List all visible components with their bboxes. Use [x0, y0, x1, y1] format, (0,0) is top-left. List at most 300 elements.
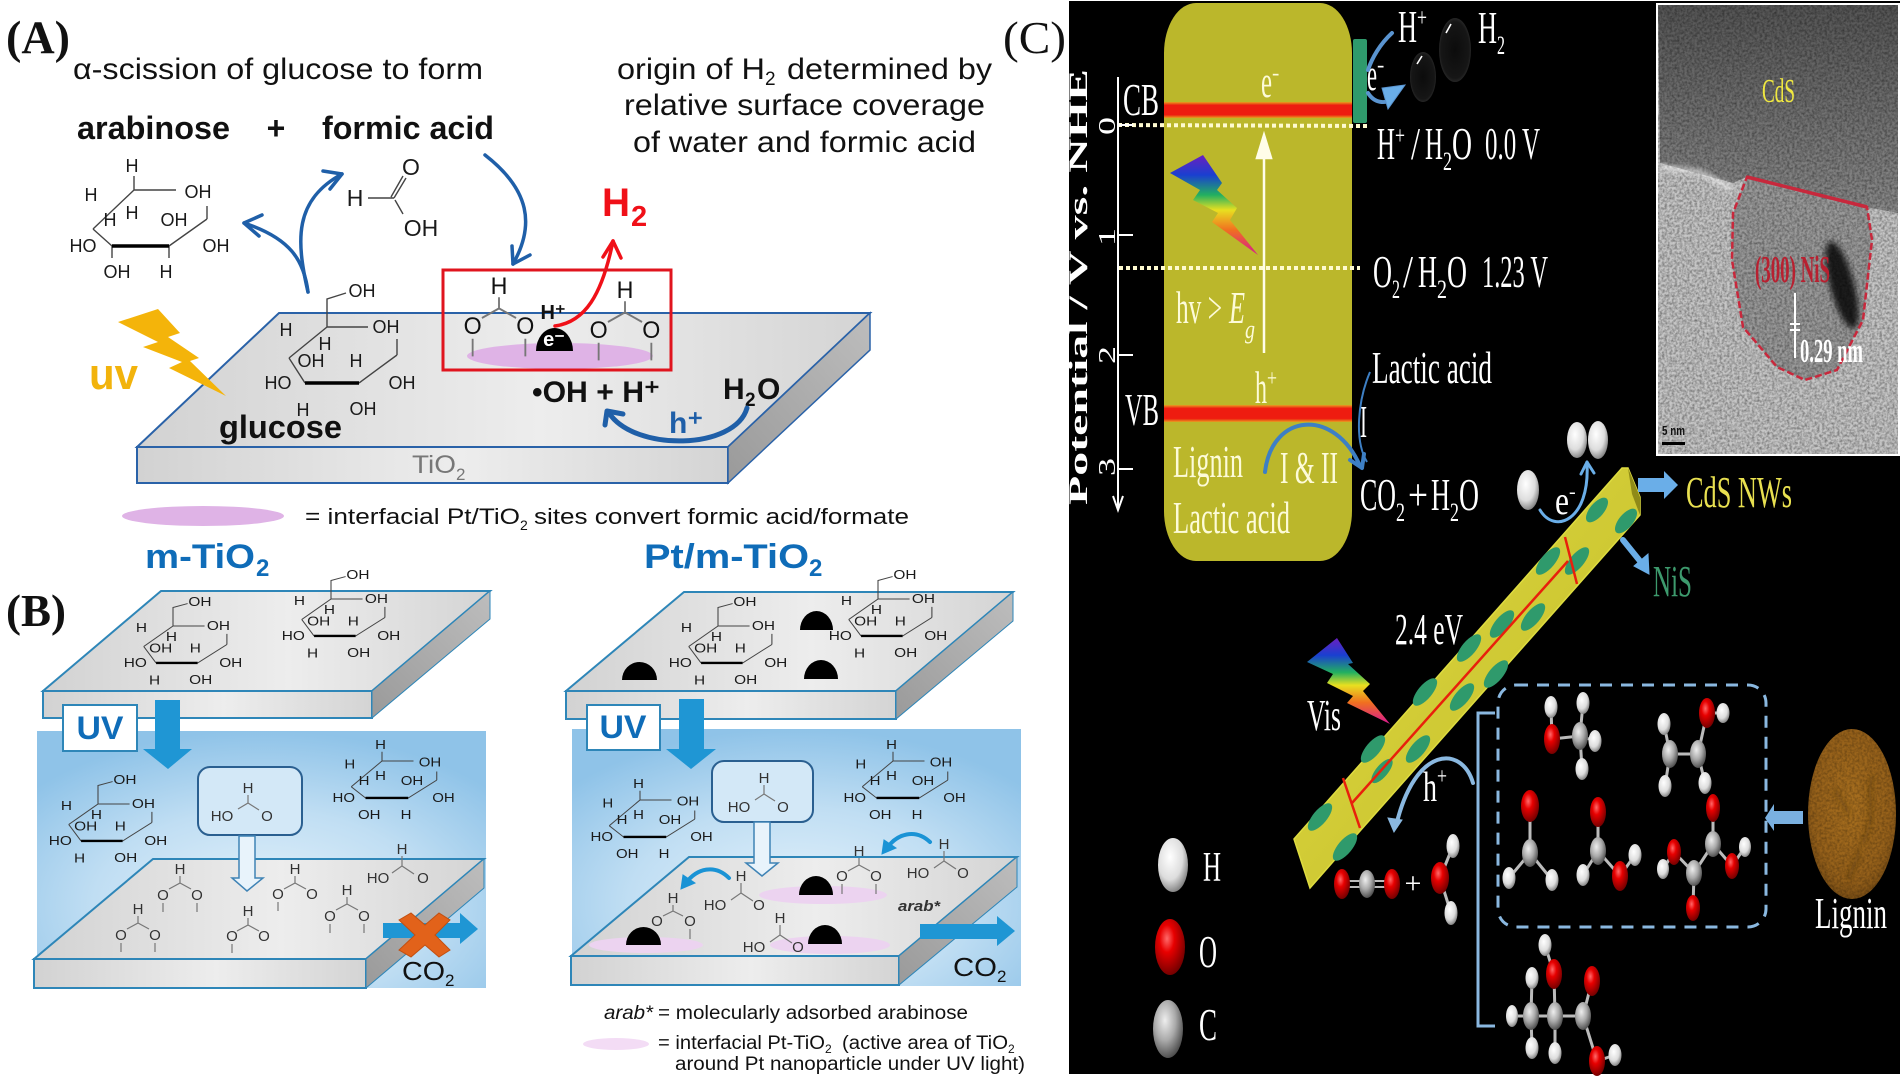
band labels and right annotations: Lactic acid [1372, 342, 1492, 393]
molecule: glucose: OH [388, 373, 416, 393]
heading Pt/m-TiO2: Pt/m-TiO [644, 538, 809, 576]
legend: interfacial Pt-TiO2: 2 [1008, 1042, 1015, 1056]
arrow: UV left [143, 700, 192, 769]
molecule: formic acid: OH [404, 215, 438, 241]
label H+: H⁺ [540, 302, 566, 324]
glucose on top plate right 2: HO [829, 629, 852, 644]
text: origin of H2: 2 [765, 69, 776, 90]
molecule: glucose: OH [372, 317, 400, 337]
glucose in liquid left: OH [74, 819, 97, 834]
molecule 6 [1506, 934, 1622, 1076]
molecule: arabinose: OH [202, 236, 230, 256]
heading Pt/m-TiO2 [644, 538, 822, 582]
band interior labels: Lactic acid [1173, 492, 1290, 543]
molecule: arabinose: OH [104, 262, 130, 282]
arabinose in liquid right 2: H [886, 768, 897, 783]
glucose on top plate left 2: OH [346, 568, 369, 583]
band labels and right annotations: H [1431, 469, 1450, 520]
molecule: glucose: OH [350, 399, 376, 419]
molecule: glucose: H [280, 320, 292, 340]
arabinose in liquid left: OH [419, 754, 441, 769]
molecule: arabinose: HO [70, 236, 96, 256]
molecule 2 [1658, 698, 1730, 797]
band labels and right annotations: 2 [1392, 275, 1400, 304]
panel C label: (C) [1003, 12, 1066, 63]
heading m-TiO2: 2 [256, 555, 269, 582]
UV box left: UV [76, 710, 124, 746]
band labels and right annotations: O [1373, 246, 1392, 297]
formate groups on left plate: O [157, 887, 169, 904]
legend: interfacial sites: sites convert formic acid/formate [534, 504, 909, 529]
glucose on top plate right 1: OH [694, 641, 717, 656]
adsorbed formate right [590, 278, 660, 360]
band interior labels [1173, 56, 1338, 543]
label H2O: O [757, 373, 780, 406]
formate groups on left plate [115, 861, 370, 953]
arabinose in liquid left: H [344, 756, 355, 771]
formic acid box left: O [261, 808, 273, 825]
legend: arab*: = molecularly adsorbed arabinose [658, 1003, 968, 1024]
arabinose in liquid right 2: HO [844, 790, 866, 805]
formate and formic on right plate: O [684, 913, 696, 930]
yellow band diagram body [1164, 3, 1352, 561]
formate and formic on right plate: HO [743, 939, 765, 956]
plate label TiO2 [412, 451, 465, 484]
molecule 1 [1544, 692, 1602, 780]
molecule 5 [1657, 794, 1751, 921]
molecule: glucose: OH [298, 351, 324, 371]
formic acid on left plate [367, 841, 429, 887]
pink active areas on right plate [589, 886, 890, 954]
legend: O atom [1155, 919, 1217, 977]
label h+: h [1423, 765, 1437, 811]
formate and formic on right plate: O [836, 868, 848, 885]
glucose on top plate left 2: HO [282, 629, 305, 644]
arrow: red to H2 [555, 241, 621, 326]
formic acid box right: O [777, 799, 789, 816]
heading: alpha scission: α-scission of glucose to form [73, 53, 483, 86]
glucose in liquid left: H [115, 819, 126, 834]
molecule: arabinose: H [126, 203, 138, 223]
formate and formic on right plate: H [736, 868, 746, 885]
text: origin of H2: relative surface coverage [624, 89, 985, 122]
text: origin of H2: origin of H [617, 53, 765, 86]
arabinose in liquid right 2: OH [912, 773, 934, 788]
green NiS strip [1353, 39, 1367, 123]
formate groups on left plate: O [258, 928, 270, 945]
formate and formic on right plate: HO [704, 897, 726, 914]
formate groups on left plate: H [133, 901, 143, 918]
molecule: formic acid: O [402, 154, 420, 180]
icon: visible light bolt [1307, 638, 1390, 724]
axis ticks labels: 1 [1094, 228, 1120, 246]
molecule: formic acid: H [347, 185, 363, 211]
glucose in liquid left: H [61, 799, 72, 814]
band labels and right annotations: H [1418, 246, 1437, 297]
curved arrow right plate 1 [882, 834, 930, 854]
label H2O: 2 [745, 390, 756, 411]
legend: interfacial Pt-TiO2: 2 [825, 1042, 832, 1056]
nanowire [1294, 468, 1641, 888]
axis ticks labels: 0 [1094, 117, 1120, 135]
band interior labels: I & II [1280, 442, 1338, 493]
arabinose in liquid right 1: OH [690, 829, 713, 844]
dashed intermediates box [1498, 685, 1766, 927]
label H2 [602, 181, 647, 233]
formic acid on left plate: HO [367, 870, 389, 887]
glucose in liquid left [49, 773, 167, 866]
glucose on top plate left 1: OH [149, 641, 172, 656]
band labels and right annotations: 1.23 V [1482, 246, 1548, 297]
glucose in liquid left: OH [132, 797, 155, 812]
adsorbed formate right: O [642, 318, 660, 344]
blocked X [399, 913, 450, 957]
UV box right: UV [600, 709, 647, 745]
arrow: UV right [666, 699, 716, 769]
formate groups on left plate: O [358, 908, 370, 925]
TEM image [1656, 3, 1900, 456]
band labels and right annotations: / [1403, 246, 1413, 297]
dotted line: O2/H2O [1119, 266, 1360, 270]
text: origin of H2: of water and formic acid [633, 126, 976, 159]
molecule: glucose: H [350, 351, 362, 371]
UV box right [587, 705, 660, 750]
H atom sphere and label: - [1569, 481, 1576, 503]
molecule: arabinose: OH [160, 210, 188, 230]
arabinose in liquid left: OH [432, 790, 455, 805]
arabinose in liquid right 2 [844, 737, 966, 822]
arrow: lignin to intermediates [1765, 804, 1803, 831]
glucose on top plate left 1: H [190, 641, 201, 656]
label H2O: H [723, 373, 745, 406]
Pt particle top 3 [804, 660, 838, 679]
band interior labels: E [1228, 282, 1245, 333]
glucose on top plate right 1: H [681, 621, 692, 636]
glucose on top plate left 1: OH [219, 656, 242, 671]
Pt particle bottom 2 [626, 927, 661, 945]
arabinose in liquid right 1: H [602, 795, 613, 810]
adsorbed formate left: O [464, 314, 482, 340]
hollow arrow right [746, 822, 778, 876]
Pt particle bottom 3 [808, 925, 842, 944]
active site ellipse [467, 343, 653, 369]
electron transfer arrows top [1368, 33, 1405, 109]
arabinose in liquid right 1: OH [677, 793, 699, 808]
formate and formic on right plate: H [668, 890, 678, 907]
label 2.4 eV: 2.4 eV [1395, 605, 1463, 654]
arabinose in liquid right 2: H [886, 737, 897, 752]
glucose on top plate right 2: H [854, 647, 865, 661]
hole oxidation arc [1265, 425, 1364, 472]
heading: arabinose: arabinose [77, 110, 230, 146]
formate groups on left plate: H [175, 861, 185, 878]
band labels and right annotations: 2 [1443, 147, 1452, 176]
glucose on top plate right 2: H [871, 603, 882, 618]
band interior labels: h [1255, 362, 1267, 413]
legend: C atom: C [1199, 999, 1217, 1050]
molecule: arabinose [70, 156, 230, 282]
label CO2 left: 2 [445, 971, 454, 990]
legend: arab*: arab* [604, 1003, 654, 1024]
formate and formic on right plate [651, 836, 969, 956]
glucose on top plate right 2: OH [893, 568, 916, 583]
arabinose in liquid right 1: H [617, 812, 627, 827]
plate label TiO2: TiO [412, 451, 456, 479]
label CO2 left: CO [402, 956, 445, 986]
arabinose in liquid left: H [359, 773, 369, 788]
legend: interfacial sites: 2 [520, 517, 528, 533]
icon: uv lightning [118, 309, 226, 396]
molecule: glucose [264, 281, 416, 420]
glucose on top plate left 2: OH [307, 614, 330, 629]
top plate left [43, 591, 490, 718]
formate groups on left plate: H [243, 903, 253, 920]
glucose on top plate left 1: H [136, 621, 147, 636]
legend: H atom [1158, 838, 1221, 892]
band labels and right annotations: H [1478, 2, 1497, 53]
band labels and right annotations: 2 [1437, 275, 1447, 304]
band labels and right annotations: e [1367, 49, 1377, 100]
band interior labels: - [1272, 60, 1279, 85]
formate and formic on right plate: H [854, 843, 864, 860]
label uv: uv [89, 350, 138, 399]
Pt particle top 1 [800, 611, 833, 630]
formate and formic on right plate: H [775, 910, 785, 927]
hollow arrow left [232, 836, 263, 891]
glucose on top plate left 1: OH [207, 619, 230, 634]
glucose on top plate right 2: OH [854, 614, 877, 629]
legend: interfacial sites [122, 504, 909, 533]
arabinose in liquid right 2: OH [943, 790, 966, 805]
adsorbed formate left: H [491, 274, 507, 300]
label NiS: NiS [1653, 557, 1692, 606]
band labels and right annotations: - [1377, 52, 1384, 77]
glucose on top plate left 2: OH [347, 646, 370, 661]
glucose in liquid left: H [91, 808, 102, 823]
glucose on top plate right 1: OH [752, 619, 775, 634]
glucose on top plate left 1 [124, 595, 242, 688]
label CO2 right: CO [953, 952, 997, 982]
formate groups on left plate: O [191, 887, 203, 904]
heading: formic acid: formic acid [322, 110, 494, 146]
label CO2 left [402, 956, 454, 990]
arrow: formic acid to active site [485, 155, 530, 264]
arabinose in liquid right 2: H [855, 756, 866, 771]
arabinose in liquid right 1: H [633, 776, 644, 791]
formate groups on left plate: H [290, 861, 300, 878]
band interior labels: Lignin [1173, 436, 1243, 487]
band labels and right annotations [1123, 1, 1548, 527]
liquid panel right [572, 729, 1021, 986]
plus: + [1405, 867, 1421, 900]
arrow: glucose to arabinose [244, 215, 308, 292]
label CO2 right: 2 [997, 967, 1006, 986]
arabinose in liquid right 1: H [633, 807, 644, 822]
potential axis [1113, 77, 1133, 510]
band labels and right annotations: / [1411, 118, 1420, 169]
molecule: glucose: H [318, 334, 332, 354]
Pt particle bottom 1 [799, 876, 833, 895]
lactic acid thin arrow [1359, 372, 1370, 462]
Pt particle with electron: e⁻ [543, 329, 565, 351]
band labels and right annotations: 2 [1396, 498, 1405, 527]
formic acid box left: H [243, 780, 253, 797]
molecule: H2O [1431, 834, 1460, 925]
formate and formic on right plate: H [939, 836, 949, 853]
Pt particle with electron [536, 328, 573, 351]
band labels and right annotations: 2 [1497, 31, 1505, 60]
axis title: Potential / V vs. NHE [1064, 69, 1093, 505]
formate groups on left plate: O [115, 927, 127, 944]
label (A): (A) [6, 12, 70, 64]
legend: O atom: O [1199, 926, 1217, 977]
arabinose in liquid right 1: H [659, 846, 669, 861]
label CO2 right [953, 952, 1006, 986]
label Vis: Vis [1307, 691, 1341, 740]
top H2 product spheres [1567, 421, 1608, 459]
arabinose in liquid left: H [401, 807, 411, 822]
formate and formic on right plate: O [792, 939, 804, 956]
arabinose in liquid left: H [375, 768, 386, 783]
label glucose: glucose [219, 409, 342, 445]
TiO2 plate [137, 313, 870, 483]
molecule: arabinose: H [126, 156, 138, 176]
formate groups on left plate: O [226, 928, 238, 945]
H atom sphere and label [1517, 470, 1576, 523]
formic acid box right: HO [728, 799, 750, 816]
text: origin of H2 [617, 53, 992, 159]
panel B: m-TiO2 vs Pt/m-TiO2 [6, 538, 1025, 1075]
band labels and right annotations: CB [1123, 74, 1159, 125]
label OH + H+: •OH + H⁺ [532, 376, 660, 409]
molecule: arabinose: OH [184, 182, 212, 202]
red box [443, 270, 671, 370]
NiS nanoparticles [1304, 494, 1641, 865]
lignin sphere [1808, 729, 1897, 899]
arabinose in liquid left: HO [333, 790, 355, 805]
arrow: glucose to formic acid [301, 171, 342, 292]
arabinose in liquid right 2: H [912, 807, 922, 822]
glucose on top plate right 1 [669, 595, 787, 688]
band interior labels: + [1267, 366, 1277, 392]
legend: interfacial Pt-TiO2 [583, 1033, 1025, 1075]
glucose on top plate right 2: OH [912, 592, 935, 607]
formic acid box left: HO [211, 808, 233, 825]
glucose in liquid left: OH [144, 834, 167, 849]
molecule: glucose: H [296, 400, 310, 420]
glucose on top plate right 1: OH [734, 673, 757, 688]
axis ticks labels: 3 [1094, 458, 1120, 476]
legend: interfacial Pt-TiO2: = interfacial Pt-TiO [658, 1033, 825, 1054]
glucose on top plate left 1: H [166, 630, 177, 645]
molecule: arabinose: H [84, 185, 98, 205]
glucose on top plate left 2: H [307, 647, 318, 661]
formic acid box left [198, 767, 302, 835]
formate and formic on right plate: O [651, 913, 663, 930]
molecule: CO2 [1334, 869, 1400, 899]
Pt particle top 2 [622, 662, 657, 680]
arabinose in liquid right 1: OH [659, 812, 681, 827]
band labels and right annotations: VB [1125, 384, 1159, 435]
bottom plate left [34, 859, 484, 988]
glucose on top plate left 2: H [294, 594, 305, 609]
glucose on top plate right 1: H [711, 630, 722, 645]
formate groups on left plate: H [342, 882, 352, 899]
band labels and right annotations: O [1447, 246, 1467, 297]
formate groups on left plate: O [324, 908, 336, 925]
glucose on top plate left 1: OH [188, 595, 211, 610]
formate and formic on right plate: O [870, 868, 882, 885]
molecule: glucose: OH [348, 281, 376, 301]
molecule: arabinose: H [104, 210, 116, 230]
arrow: CO2 right [920, 916, 1015, 946]
glucose in liquid left: HO [49, 834, 72, 849]
glucose on top plate left 2: H [324, 603, 335, 618]
curved arrow right plate 2 [681, 869, 729, 889]
formic acid box right: H [759, 770, 769, 787]
arabinose in liquid left: OH [401, 773, 423, 788]
text: origin of H2: determined by [787, 53, 992, 86]
glucose on top plate left 1: H [149, 674, 160, 688]
glucose in liquid left: H [74, 852, 85, 866]
adsorbed formate left [464, 274, 534, 356]
glucose on top plate right 1: H [694, 674, 705, 688]
band labels and right annotations: O [1459, 469, 1479, 520]
arabinose in liquid right 2: OH [869, 807, 891, 822]
arrow: CO2 left [383, 913, 478, 944]
legend: interfacial Pt-TiO2: (active area of TiO [842, 1033, 1008, 1054]
molecule: glucose: HO [264, 373, 292, 393]
band labels and right annotations: H [1425, 118, 1443, 169]
glucose on top plate left 1: HO [124, 656, 147, 671]
panel A: glucose on TiO2 [6, 12, 992, 533]
band labels and right annotations: H [1398, 1, 1417, 52]
glucose on top plate right 1: OH [733, 595, 756, 610]
formate groups on left plate: O [306, 886, 318, 903]
glucose on top plate right 2: OH [924, 629, 947, 644]
legend: interfacial sites: = interfacial Pt/TiO [305, 504, 520, 529]
heading m-TiO2: m-TiO [145, 538, 255, 576]
band labels and right annotations: 0.0 V [1485, 118, 1540, 169]
glucose in liquid left: OH [113, 773, 136, 788]
glucose in liquid left: OH [114, 851, 137, 866]
arabinose in liquid right 1: OH [616, 846, 638, 861]
band interior labels: e [1261, 56, 1272, 107]
formic acid box right [712, 761, 813, 822]
arabinose in liquid right 2: OH [930, 754, 952, 769]
TEM image: 5 nm [1662, 423, 1685, 438]
label H2: 2 [631, 201, 647, 233]
molecule 3 [1502, 790, 1558, 891]
panel C: CdS/NiS photocatalysis [1064, 1, 1900, 1076]
arrow: NiS [1623, 540, 1649, 574]
label h+: + [1437, 764, 1447, 790]
legend: H atom: H [1203, 845, 1221, 891]
band labels and right annotations: + [1408, 469, 1428, 520]
dotted line: H+/H2O [1118, 125, 1368, 126]
arabinose in liquid right 2: H [870, 773, 880, 788]
adsorbed formate right: H [617, 278, 633, 304]
formic acid on left plate: H [397, 841, 407, 858]
arabinose in liquid left: H [375, 737, 386, 752]
UV box left [63, 705, 137, 751]
adsorbed formate right: O [590, 318, 608, 344]
label h+: h⁺ [669, 407, 703, 440]
formate and formic on right plate: O [753, 897, 765, 914]
band labels and right annotations: I [1360, 396, 1367, 447]
valence band line [1164, 405, 1352, 422]
liquid panel left [37, 731, 486, 988]
